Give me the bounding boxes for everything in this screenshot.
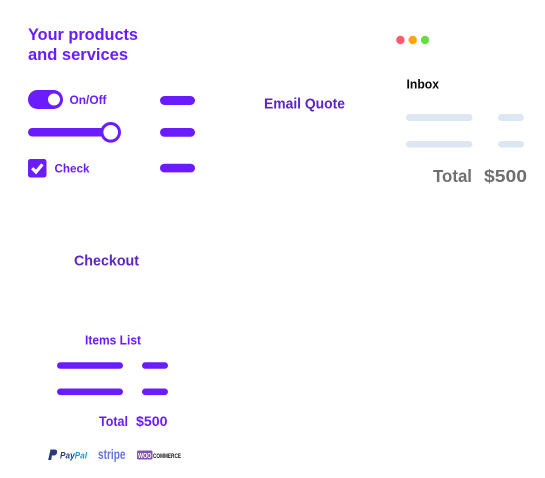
panel: products and services	[28, 25, 195, 178]
heading: inbox: Inbox	[406, 76, 440, 91]
panel: inbox window	[396, 36, 527, 186]
toggle: on/off	[28, 90, 107, 109]
heading: your products and services: and services	[28, 45, 128, 64]
checkout total: $500	[136, 414, 168, 429]
logo: stripe: stripe	[98, 447, 126, 462]
checkout total	[99, 414, 168, 429]
inbox total: $500	[484, 166, 527, 186]
heading: your products and services	[28, 25, 138, 64]
heading: your products and services: Your products	[28, 25, 138, 44]
inbox total: Total	[433, 166, 472, 186]
checkbox: check: Check	[54, 162, 90, 176]
option value bars	[160, 96, 195, 172]
logo: woocommerce: WOO	[138, 451, 152, 460]
inbox placeholder rows	[406, 114, 524, 148]
toggle: on/off: On/Off	[70, 93, 107, 107]
heading: items list: Items List	[85, 332, 142, 348]
slider	[28, 124, 119, 141]
logo: woocommerce	[137, 450, 181, 460]
label: checkout: Checkout	[74, 252, 139, 270]
inbox total	[433, 166, 527, 186]
logo: paypal: PayPal	[60, 450, 87, 460]
window control dots	[396, 36, 429, 44]
panel: checkout summary	[57, 332, 168, 429]
logo: woocommerce: COMMERCE	[153, 453, 181, 460]
checkout total: Total	[99, 414, 128, 429]
item placeholder rows	[57, 362, 168, 395]
label: email quote: Email Quote	[264, 96, 345, 112]
checkbox: check	[28, 159, 90, 178]
payment logos	[48, 447, 181, 462]
